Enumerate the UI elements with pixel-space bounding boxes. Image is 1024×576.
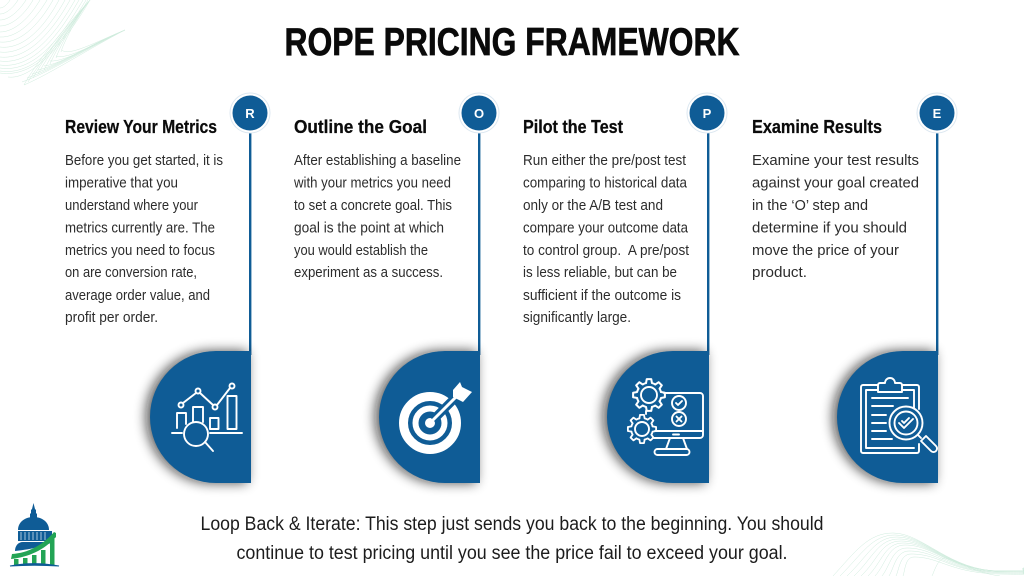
badge P bbox=[687, 93, 727, 133]
text: review body bbox=[65, 152, 223, 326]
text: examine body: against your goal created bbox=[752, 174, 919, 192]
text: pilot body: only or the A/B test and bbox=[523, 197, 663, 214]
connector line O bbox=[478, 130, 480, 355]
connector line R bbox=[249, 130, 251, 355]
text: review body: metrics you need to focus bbox=[65, 242, 215, 259]
text: examine body: move the price of your bbox=[752, 242, 899, 259]
text: pilot body: sufficient if the outcome is bbox=[523, 287, 681, 304]
text: review body: metrics currently are. The bbox=[65, 220, 215, 236]
text: outline body bbox=[293, 152, 461, 281]
icon: target with arrow bbox=[404, 382, 472, 450]
text: outline body: After establishing a baseline bbox=[294, 152, 461, 169]
text: pilot body: to control group. A pre/post bbox=[523, 242, 690, 259]
title: ROPE PRICING FRAMEWORK bbox=[284, 21, 740, 64]
footer text bbox=[200, 514, 824, 564]
panel: E - Examine Results bbox=[752, 93, 957, 483]
connector line E bbox=[936, 130, 938, 355]
text: examine body: product. bbox=[752, 264, 807, 281]
badge O bbox=[459, 93, 499, 133]
text: review body: Before you get started, it is bbox=[65, 152, 223, 169]
badge E bbox=[917, 93, 957, 133]
text: pilot body: significantly large. bbox=[523, 309, 631, 326]
half disc P bbox=[603, 351, 709, 483]
panel: P - Pilot the Test bbox=[523, 93, 727, 483]
text: pilot body: compare your outcome data bbox=[523, 220, 689, 236]
text: pilot body: is less reliable, but can be bbox=[523, 264, 677, 281]
badge P: P bbox=[703, 106, 712, 121]
heading: Examine Results: Examine Results bbox=[752, 117, 882, 137]
badge O: O bbox=[474, 106, 484, 121]
text: review body: profit per order. bbox=[65, 309, 158, 326]
half disc R bbox=[146, 351, 251, 483]
text: review body: imperative that you bbox=[65, 174, 178, 192]
icon: chart with magnifier bbox=[172, 384, 242, 451]
decorative wave: top left bbox=[0, 0, 125, 85]
heading: Outline the Goal: Outline the Goal bbox=[294, 117, 427, 137]
half disc O bbox=[375, 351, 480, 483]
text: outline body: with your metrics you need bbox=[293, 174, 451, 192]
heading: Pilot the Test: Pilot the Test bbox=[523, 117, 623, 137]
decorative wave: bottom right bbox=[833, 533, 1024, 576]
half disc E bbox=[833, 351, 938, 483]
text: outline body: goal is the point at which bbox=[294, 220, 444, 236]
text: review body: on are conversion rate, bbox=[65, 264, 197, 281]
text: review body: understand where your bbox=[65, 197, 198, 214]
badge R: R bbox=[245, 106, 255, 121]
text: outline body: experiment as a success. bbox=[294, 264, 443, 281]
logo: capitol dome with rising bars bbox=[10, 503, 59, 566]
text: outline body: to set a concrete goal. This bbox=[294, 197, 452, 214]
badge R bbox=[230, 93, 270, 133]
text: outline body: you would establish the bbox=[294, 242, 428, 259]
text: examine body: determine if you should bbox=[752, 220, 907, 236]
connector line P bbox=[707, 130, 709, 355]
footer text: continue to test pricing until you see the price fail to exceed your goal. bbox=[236, 543, 788, 564]
panel: O - Outline the Goal bbox=[293, 93, 499, 483]
text: examine body: Examine your test results bbox=[752, 152, 919, 169]
text: review body: average order value, and bbox=[65, 287, 210, 304]
heading: Review Your Metrics: Review Your Metrics bbox=[65, 117, 217, 137]
text: examine body bbox=[752, 152, 919, 281]
badge E: E bbox=[933, 106, 942, 121]
panel: R - Review Your Metrics bbox=[65, 93, 270, 483]
text: pilot body: Run either the pre/post test bbox=[523, 152, 687, 169]
text: pilot body bbox=[523, 152, 690, 326]
text: examine body: in the ‘O’ step and bbox=[752, 197, 868, 214]
icon: clipboard with magnifier bbox=[861, 378, 937, 453]
text: pilot body: comparing to historical data bbox=[523, 174, 688, 192]
icon: gears and monitor bbox=[628, 379, 703, 455]
footer text: Loop Back & Iterate: This step just sends you back to the beginning. You should bbox=[200, 514, 824, 535]
